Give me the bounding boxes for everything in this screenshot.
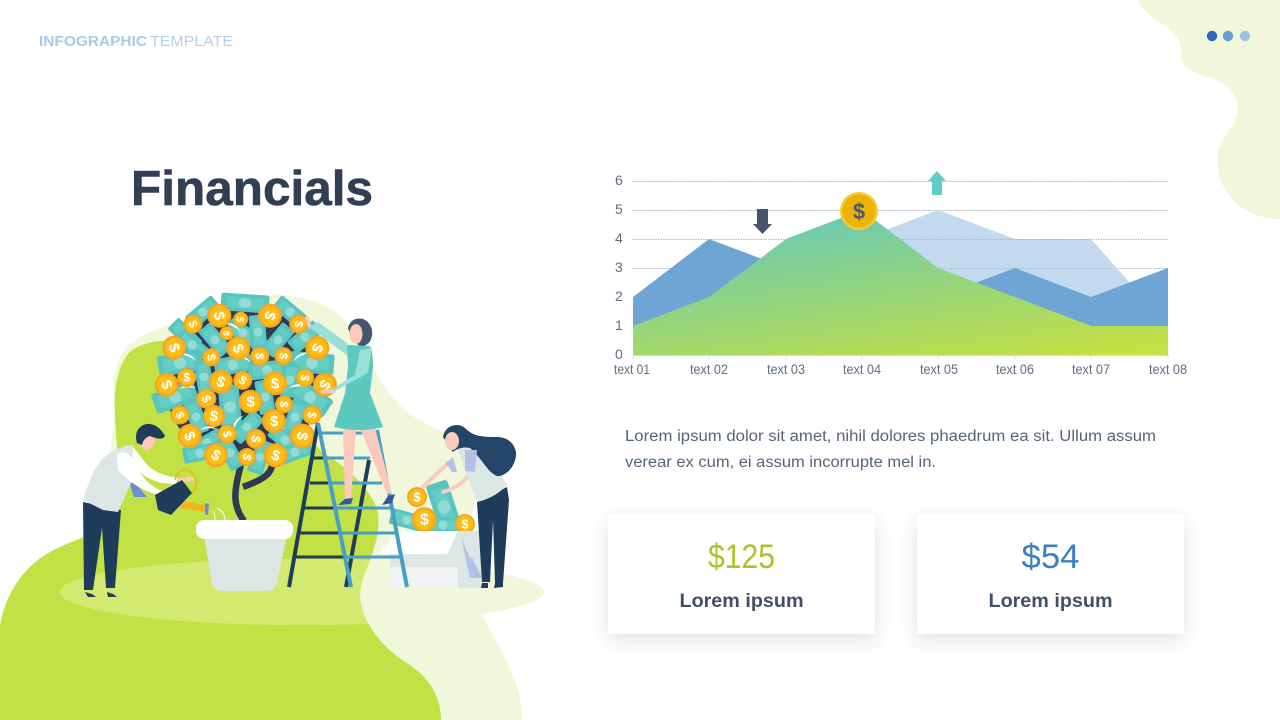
box flaps	[377, 531, 458, 554]
y axis labels	[615, 172, 623, 362]
gold coins: $	[269, 446, 283, 465]
hair	[136, 424, 165, 445]
stat card: $125	[608, 514, 875, 634]
stat card: $54: Lorem ipsum	[988, 590, 1112, 612]
hair	[348, 318, 372, 347]
banknote highlights	[179, 320, 309, 430]
y axis labels: 4	[615, 230, 623, 246]
hair	[443, 425, 516, 476]
stat card: $54	[917, 514, 1184, 634]
gold coins: $	[307, 341, 326, 355]
y axis labels: 0	[615, 346, 623, 362]
y axis labels: 5	[615, 201, 623, 217]
dress	[334, 345, 383, 430]
gold coins: $	[260, 309, 279, 323]
x axis labels: text 07	[1072, 361, 1110, 377]
gold coins: $	[234, 317, 245, 323]
icon: dollar coin	[840, 192, 878, 230]
header label: TEMPLATE	[150, 33, 233, 50]
x axis labels: text 02	[690, 361, 728, 377]
x axis labels: text 01	[614, 361, 650, 377]
x axis labels	[614, 361, 1187, 377]
illustration: open box with money: $	[420, 512, 429, 529]
head	[139, 430, 155, 450]
face	[445, 432, 459, 450]
gold coins: $	[220, 429, 235, 439]
gold coins: $	[291, 319, 306, 329]
tie	[130, 453, 147, 497]
banknotes in box	[389, 508, 425, 532]
icon: up arrow	[928, 171, 946, 195]
gold coins: $	[208, 407, 220, 426]
body text: verear ex cum, ei assum incorrupte mel in.	[625, 454, 936, 471]
gold coins: $	[185, 318, 201, 330]
hands	[164, 479, 193, 496]
back arm	[132, 447, 178, 484]
ground ellipse	[60, 559, 544, 625]
area chart	[614, 171, 1187, 377]
sleeves	[446, 450, 477, 472]
stat card: $54: $54	[1022, 538, 1080, 576]
gold coins: $	[304, 410, 319, 420]
illustration: ladder	[289, 423, 407, 587]
y axis labels: 3	[615, 259, 623, 275]
coins in box: $	[413, 490, 421, 504]
background blob: pale green	[100, 295, 522, 720]
trousers	[83, 502, 121, 590]
gridlines	[633, 182, 1168, 326]
stat card: $125: Lorem ipsum	[680, 590, 804, 612]
gold coins: $	[214, 373, 228, 392]
x axis labels: text 04	[843, 361, 881, 377]
gold coins: $	[221, 330, 232, 337]
lower arm sleeve	[332, 348, 372, 392]
gold coins: $	[204, 353, 219, 362]
water sprinkle	[213, 508, 225, 520]
front arm	[117, 452, 162, 495]
tree trunk	[235, 465, 272, 521]
gold coins: $	[276, 400, 291, 409]
background blob: top right	[1138, 0, 1280, 219]
series: light blue	[786, 210, 1168, 355]
face	[350, 324, 362, 344]
y axis labels: 6	[615, 172, 623, 188]
illustration: money tree	[151, 292, 341, 591]
illustration: woman on ladder	[307, 318, 395, 505]
gridlines over light series	[900, 240, 1113, 268]
illustration: open box with money: $	[461, 516, 469, 532]
gold coins: $	[271, 375, 280, 392]
series: gradient green	[633, 210, 1168, 355]
legs	[343, 428, 392, 500]
gold coins: $	[297, 373, 312, 383]
shirt	[457, 447, 507, 502]
banknotes	[151, 292, 335, 476]
gold coins: $	[248, 434, 264, 445]
body text: Lorem ipsum dolor sit amet, nihil dolores phaedrum ea sit. Ullum assum	[625, 428, 1156, 445]
x axis	[633, 355, 1168, 359]
gold coins: $	[293, 430, 311, 442]
icon: down arrow	[753, 209, 772, 234]
gold coins: $	[172, 409, 188, 421]
gold coins: $	[228, 342, 247, 356]
header label: INFOGRAPHIC	[39, 33, 147, 50]
shoes	[85, 592, 117, 597]
gold coins: $	[157, 378, 176, 392]
gold coins	[151, 300, 341, 472]
shoes	[338, 494, 395, 505]
torso	[83, 445, 137, 512]
gold coins: $	[236, 373, 250, 388]
gold coins: $	[164, 341, 183, 355]
title: Financials	[131, 162, 373, 216]
gold coins: $	[276, 351, 291, 361]
y axis labels: 2	[615, 288, 623, 304]
gold coins: $	[183, 371, 190, 385]
shoes	[481, 583, 503, 588]
illustration: man watering	[83, 424, 209, 597]
arms	[423, 463, 473, 492]
gold coins: $	[315, 377, 334, 393]
background blob: lime green	[0, 340, 441, 720]
gold coins: $	[180, 429, 199, 444]
y axis labels: 1	[615, 317, 623, 333]
x axis labels: text 06	[996, 361, 1034, 377]
upper arm sleeve	[309, 322, 348, 356]
gold coins: $	[208, 446, 224, 466]
icon: dollar coin: $	[853, 199, 865, 224]
tree crown backing	[165, 302, 321, 462]
watering can	[155, 470, 209, 515]
header label	[39, 33, 233, 50]
illustration: open box with money	[377, 479, 491, 588]
body text	[625, 428, 1156, 471]
gold coins: $	[270, 413, 279, 430]
pagination dots	[1207, 31, 1250, 41]
flower pot	[196, 520, 293, 591]
x axis labels: text 03	[767, 361, 805, 377]
stat card: $125: $125	[708, 538, 775, 576]
box body	[390, 554, 458, 588]
gold coins: $	[210, 310, 228, 322]
gold coins: $	[247, 394, 256, 411]
trousers	[477, 487, 509, 583]
x axis labels: text 05	[920, 361, 958, 377]
gold coins: $	[252, 352, 267, 361]
x axis labels: text 08	[1149, 361, 1187, 377]
illustration: woman with box	[423, 425, 516, 588]
gold coins: $	[198, 393, 215, 405]
gold coins: $	[239, 451, 255, 463]
hands	[307, 318, 334, 392]
series: mid blue	[633, 239, 1168, 355]
